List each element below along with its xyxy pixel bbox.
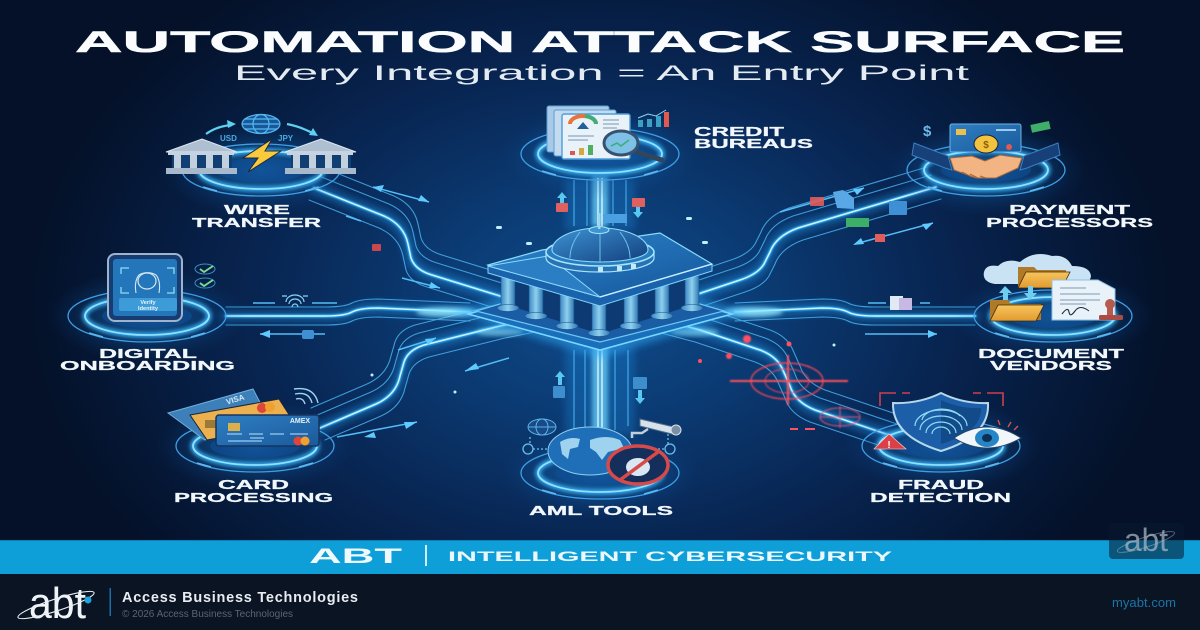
label: CARD — [218, 477, 289, 492]
icon: visa card — [168, 389, 264, 440]
icon: small globe — [528, 419, 556, 435]
watermark logo: abt — [1124, 522, 1168, 558]
label: AML TOOLS — [529, 503, 674, 518]
label — [694, 124, 814, 151]
icon: signed document — [1052, 280, 1115, 320]
label: WIRE — [224, 202, 291, 217]
icon: money ban — [608, 446, 668, 484]
label — [986, 202, 1154, 230]
copyright: © 2026 Access Business Technologies — [122, 609, 293, 620]
label: PROCESSING — [174, 490, 333, 505]
document packet — [890, 296, 912, 310]
node: document vendors — [953, 254, 1153, 373]
columns — [497, 276, 703, 336]
icon: card — [950, 124, 1021, 152]
vertical beams — [565, 176, 635, 435]
node: wire transfer: USD — [220, 134, 237, 143]
icon: amex card: AMEX — [290, 418, 310, 425]
icon: mini chart — [638, 110, 669, 127]
sparkle dots — [370, 217, 836, 394]
label — [174, 477, 333, 505]
building wall — [504, 272, 696, 334]
label: VENDORS — [990, 358, 1113, 373]
junction flares — [416, 307, 783, 336]
label: DETECTION — [870, 490, 1011, 505]
data tag card side — [553, 371, 565, 398]
icon: warning triangle: ! — [887, 440, 891, 451]
fingerprint packet — [282, 295, 308, 307]
icon: camera — [632, 419, 681, 438]
id packet — [302, 330, 314, 339]
icon: gold card — [190, 399, 295, 440]
red threat target — [698, 335, 860, 429]
tagline bar: INTELLIGENT CYBERSECURITY — [448, 549, 892, 564]
icon: phone: Verify — [140, 300, 157, 306]
label — [192, 202, 322, 230]
data tag up — [556, 192, 568, 212]
icon: globe — [548, 427, 632, 475]
platform — [452, 272, 748, 358]
node: fraud detection — [841, 393, 1041, 505]
label: FRAUD — [898, 477, 984, 492]
icon: cloud — [984, 254, 1091, 284]
connection traces — [226, 167, 975, 448]
icon: eye — [954, 420, 1021, 448]
website: myabt.com — [1112, 595, 1176, 610]
node: digital onboarding — [47, 254, 247, 373]
icon: contactless — [294, 389, 318, 404]
icon: exchange arrows — [206, 124, 314, 134]
icon: left bank — [166, 139, 237, 174]
icon: right bank — [285, 139, 356, 174]
label: ONBOARDING — [60, 358, 235, 373]
label — [870, 477, 1011, 505]
node: wire transfer — [161, 114, 361, 230]
company name: Access Business Technologies — [122, 590, 358, 606]
central bank building — [452, 213, 748, 358]
icon: stamp — [1099, 299, 1123, 320]
icon: handshake — [912, 143, 1060, 178]
watermark logo — [1109, 522, 1184, 559]
icon: bottom folder — [990, 300, 1044, 321]
label: PROCESSORS — [986, 215, 1154, 230]
data tag down — [632, 198, 645, 218]
node: card processing — [155, 389, 355, 505]
icon: visa card: VISA — [225, 393, 246, 407]
roof — [488, 264, 712, 306]
icon: dollar sign: $ — [923, 123, 932, 140]
label — [978, 346, 1124, 373]
icon: phone: Identity — [138, 306, 159, 312]
icon: amex card — [216, 415, 319, 446]
wire packet — [372, 244, 381, 251]
tagline bar: ABT — [309, 545, 402, 568]
icon: reports — [547, 106, 630, 159]
node: aml tools — [500, 419, 700, 519]
label: BUREAUS — [694, 136, 814, 151]
icon: shield — [893, 393, 988, 451]
icon: coin — [974, 135, 998, 153]
icon: checks — [195, 264, 215, 288]
icon: top folder — [1018, 267, 1070, 288]
icon: network nodes — [523, 434, 675, 454]
title: AUTOMATION ATTACK SURFACE — [75, 26, 1125, 59]
label: PAYMENT — [1009, 202, 1130, 217]
label: TRANSFER — [192, 215, 322, 230]
icon: globe — [242, 114, 280, 134]
node: payment processors — [886, 121, 1154, 230]
icon: cash — [1030, 121, 1051, 133]
label: DIGITAL — [99, 346, 197, 361]
tagline bar — [0, 540, 1200, 574]
icon: magnifier — [604, 131, 662, 160]
footer — [0, 574, 1200, 630]
icon: lightning — [243, 139, 281, 172]
floating data packets and arrows — [253, 185, 937, 438]
icon: warning triangle — [874, 434, 906, 451]
icon: phone — [108, 254, 182, 321]
node: credit bureaus — [500, 106, 814, 200]
label — [60, 346, 235, 373]
footer logo: abt — [29, 579, 86, 628]
data tag fraud side — [633, 377, 647, 404]
icon: scan brackets — [880, 393, 1003, 406]
label: CREDIT — [694, 124, 784, 139]
icon: sync arrows — [999, 286, 1037, 300]
node: wire transfer: JPY — [278, 134, 294, 143]
label: DOCUMENT — [978, 346, 1124, 361]
dome — [546, 252, 654, 272]
icon: coin: $ — [983, 140, 989, 151]
subtitle: Every Integration = An Entry Point — [234, 62, 969, 85]
payment documents — [810, 190, 907, 242]
